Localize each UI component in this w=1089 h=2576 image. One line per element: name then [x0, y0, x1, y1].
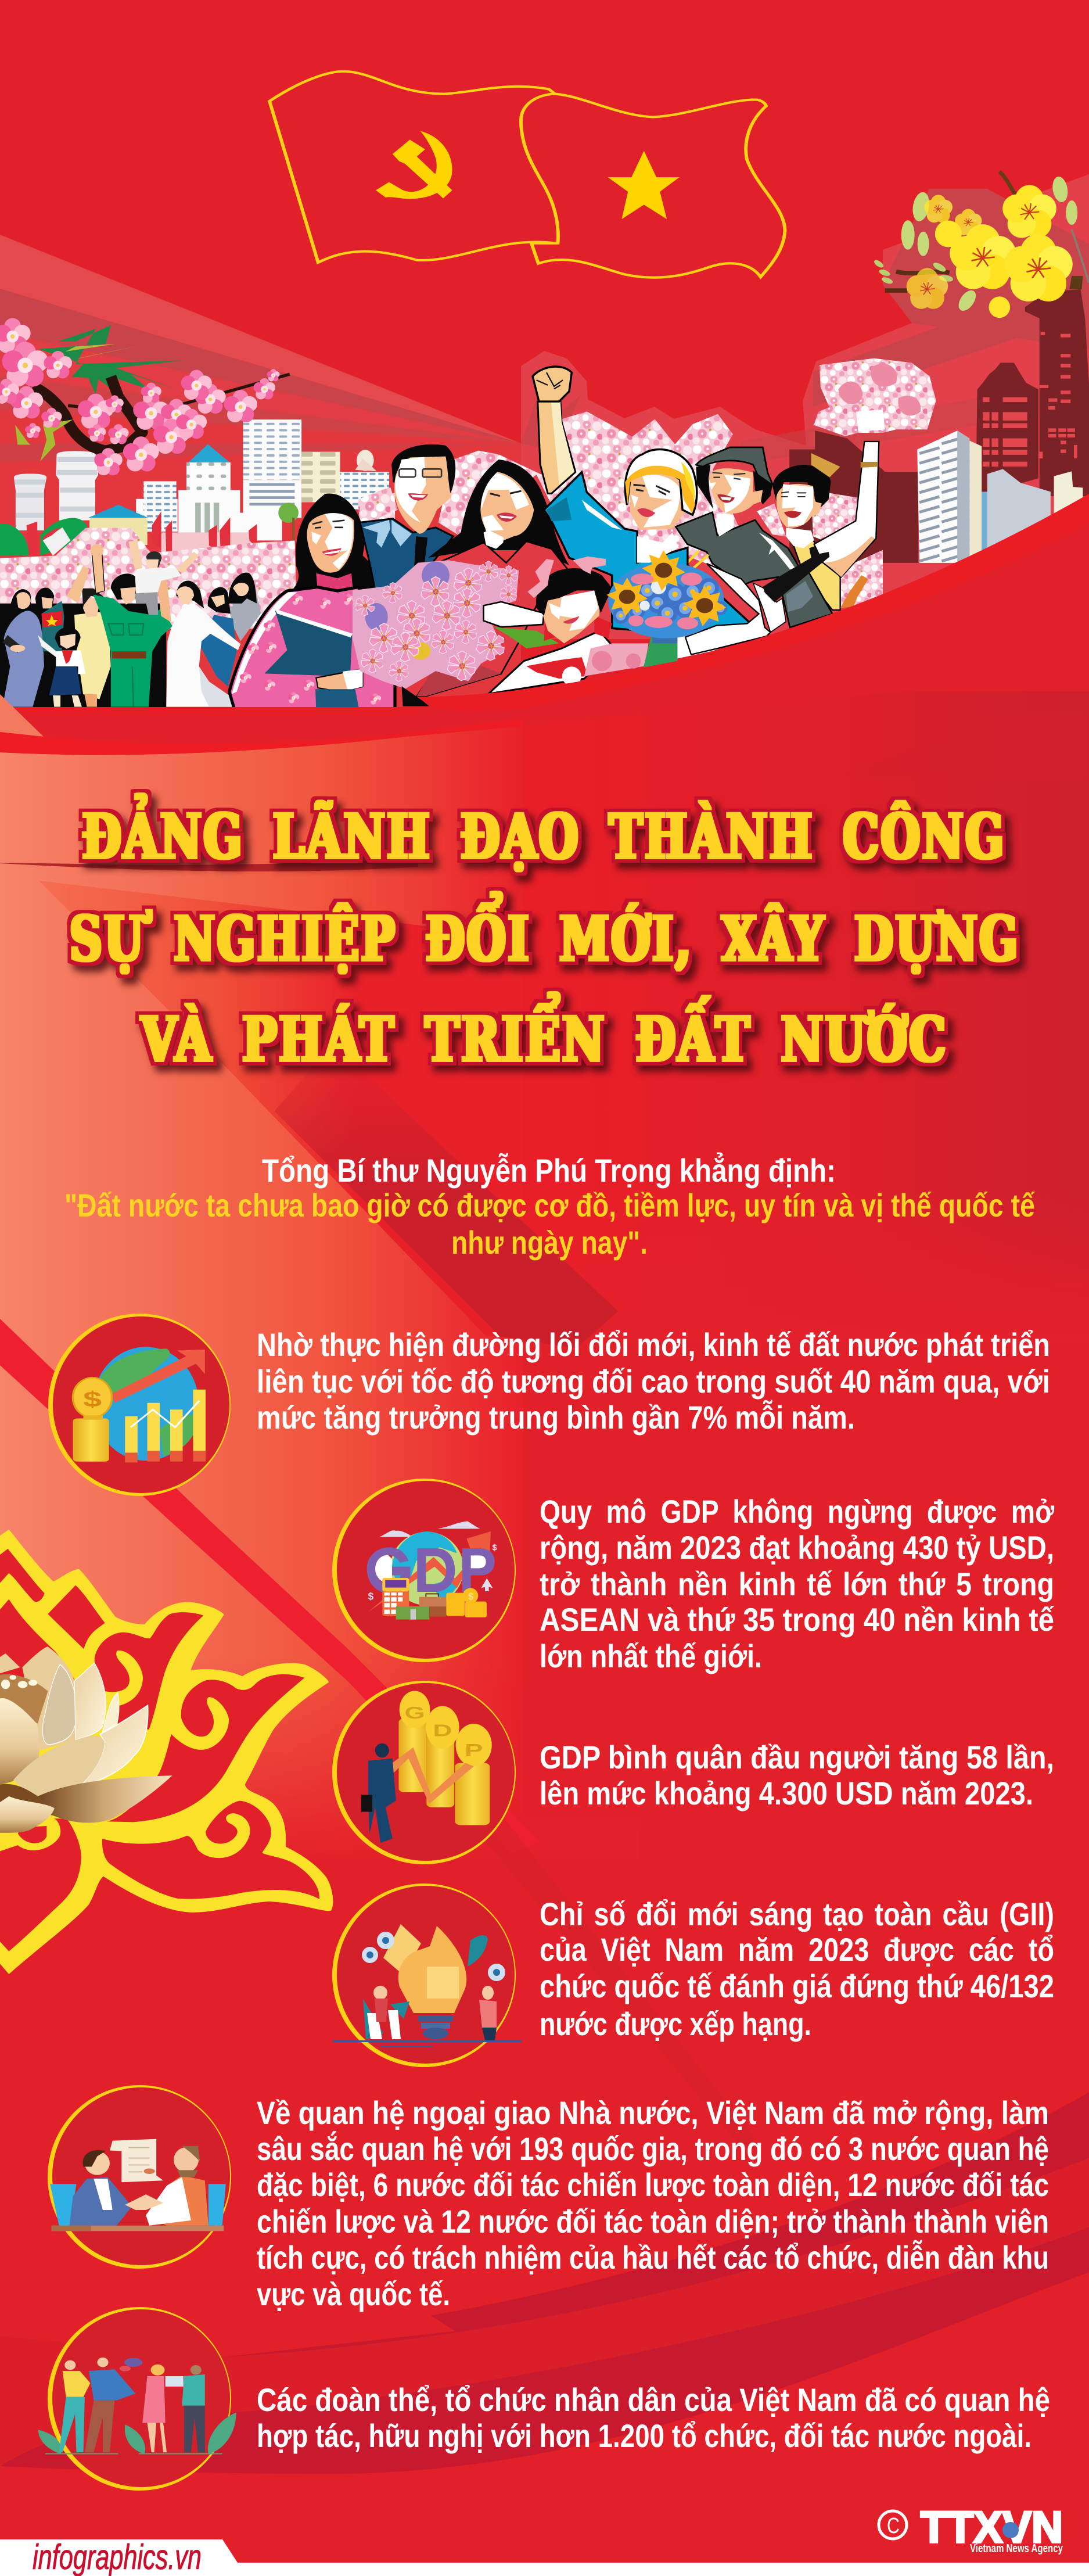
crowd: woman in yellow	[67, 566, 111, 707]
crowd left	[0, 493, 395, 709]
title streak	[0, 859, 418, 871]
quote: Tổng Bí thư Nguyễn Phú Trọng khẳng định:	[262, 1152, 836, 1189]
icon: GDP per capita	[332, 1681, 516, 1864]
item 5	[48, 2085, 1049, 2312]
icon: people cooperating	[38, 2307, 236, 2491]
apricot blossom	[873, 171, 1089, 318]
icon: GDP: $	[493, 1543, 497, 1552]
diagonal stripe	[0, 1319, 540, 1853]
text block 2: lớn nhất thế giới.	[540, 1638, 762, 1674]
icon: GDP per capita: G	[404, 1703, 425, 1723]
sunflower bouquet	[606, 550, 727, 638]
ribbon swoosh	[0, 494, 1089, 755]
right woman	[772, 442, 879, 610]
text block 5: vực và quốc tế.	[257, 2276, 450, 2312]
pink bouquet	[353, 560, 559, 706]
peach blossom branch	[0, 318, 290, 475]
flag: star	[521, 94, 785, 278]
skyline left	[0, 419, 389, 555]
man with glasses	[360, 444, 455, 590]
pink blossom fields	[0, 358, 936, 629]
icon: GDP per capita: D	[433, 1721, 452, 1740]
hero illustration	[0, 171, 1089, 709]
lotus flower	[0, 1646, 172, 1833]
text block 1	[257, 1326, 1050, 1436]
logo: TTXVN: TTXVN	[921, 2503, 1063, 2552]
text block 3	[540, 1739, 1054, 1811]
worker	[533, 367, 753, 636]
footer	[0, 2538, 1089, 2576]
icon: GDP per capita: P	[465, 1740, 483, 1760]
item 1	[48, 1314, 1050, 1496]
central group	[353, 367, 755, 706]
crowd: women in ao dai	[166, 572, 261, 707]
text block 6	[257, 2381, 1050, 2454]
soldier and right woman	[675, 442, 883, 627]
icon: GDP: $	[368, 1590, 374, 1602]
text block 4	[540, 1896, 1054, 2042]
title	[70, 793, 1020, 1075]
quote: như ngày nay".	[451, 1224, 648, 1261]
quote	[64, 1152, 1036, 1261]
item 4	[332, 1883, 1054, 2067]
soldier arm and rifle	[685, 546, 829, 655]
text block 4: nước được xếp hạng.	[540, 2005, 811, 2042]
icon: handshake	[48, 2085, 231, 2269]
bottom swooshes	[0, 2092, 1089, 2474]
crowd: girl	[38, 627, 85, 707]
flag: party	[269, 71, 577, 263]
logo: TTXVN: C	[887, 2514, 900, 2538]
icon: GDP: $	[468, 1591, 474, 1602]
crowd: child on shoulders	[128, 540, 199, 615]
lotus ornament	[0, 1530, 333, 1974]
folder woman	[229, 493, 395, 709]
item 2	[332, 1479, 1055, 1674]
crowd: woman in purple	[2, 589, 44, 707]
text block 2	[540, 1493, 1055, 1674]
lower gradient background	[0, 691, 1089, 2150]
item 6	[38, 2307, 1050, 2491]
text block 1: mức tăng trưởng trung bình gần 7% mỗi năm.	[257, 1399, 855, 1436]
icon: growth globe	[48, 1314, 231, 1496]
icon: innovation bulb	[332, 1883, 522, 2067]
sun rays left	[0, 235, 521, 707]
crowd: man with flag	[35, 587, 64, 651]
soldier	[675, 447, 832, 627]
girl	[488, 557, 614, 694]
roses	[584, 631, 755, 676]
icon: GDP	[332, 1479, 516, 1662]
item 3	[332, 1681, 1054, 1864]
icon: growth globe: $	[83, 1387, 102, 1411]
footer: infographics.vn	[33, 2538, 202, 2576]
skyline right	[789, 289, 1089, 563]
crowd: soldier	[91, 544, 172, 707]
sun rays right	[521, 174, 1089, 639]
text block 5	[257, 2094, 1049, 2312]
woman in red	[417, 460, 570, 697]
